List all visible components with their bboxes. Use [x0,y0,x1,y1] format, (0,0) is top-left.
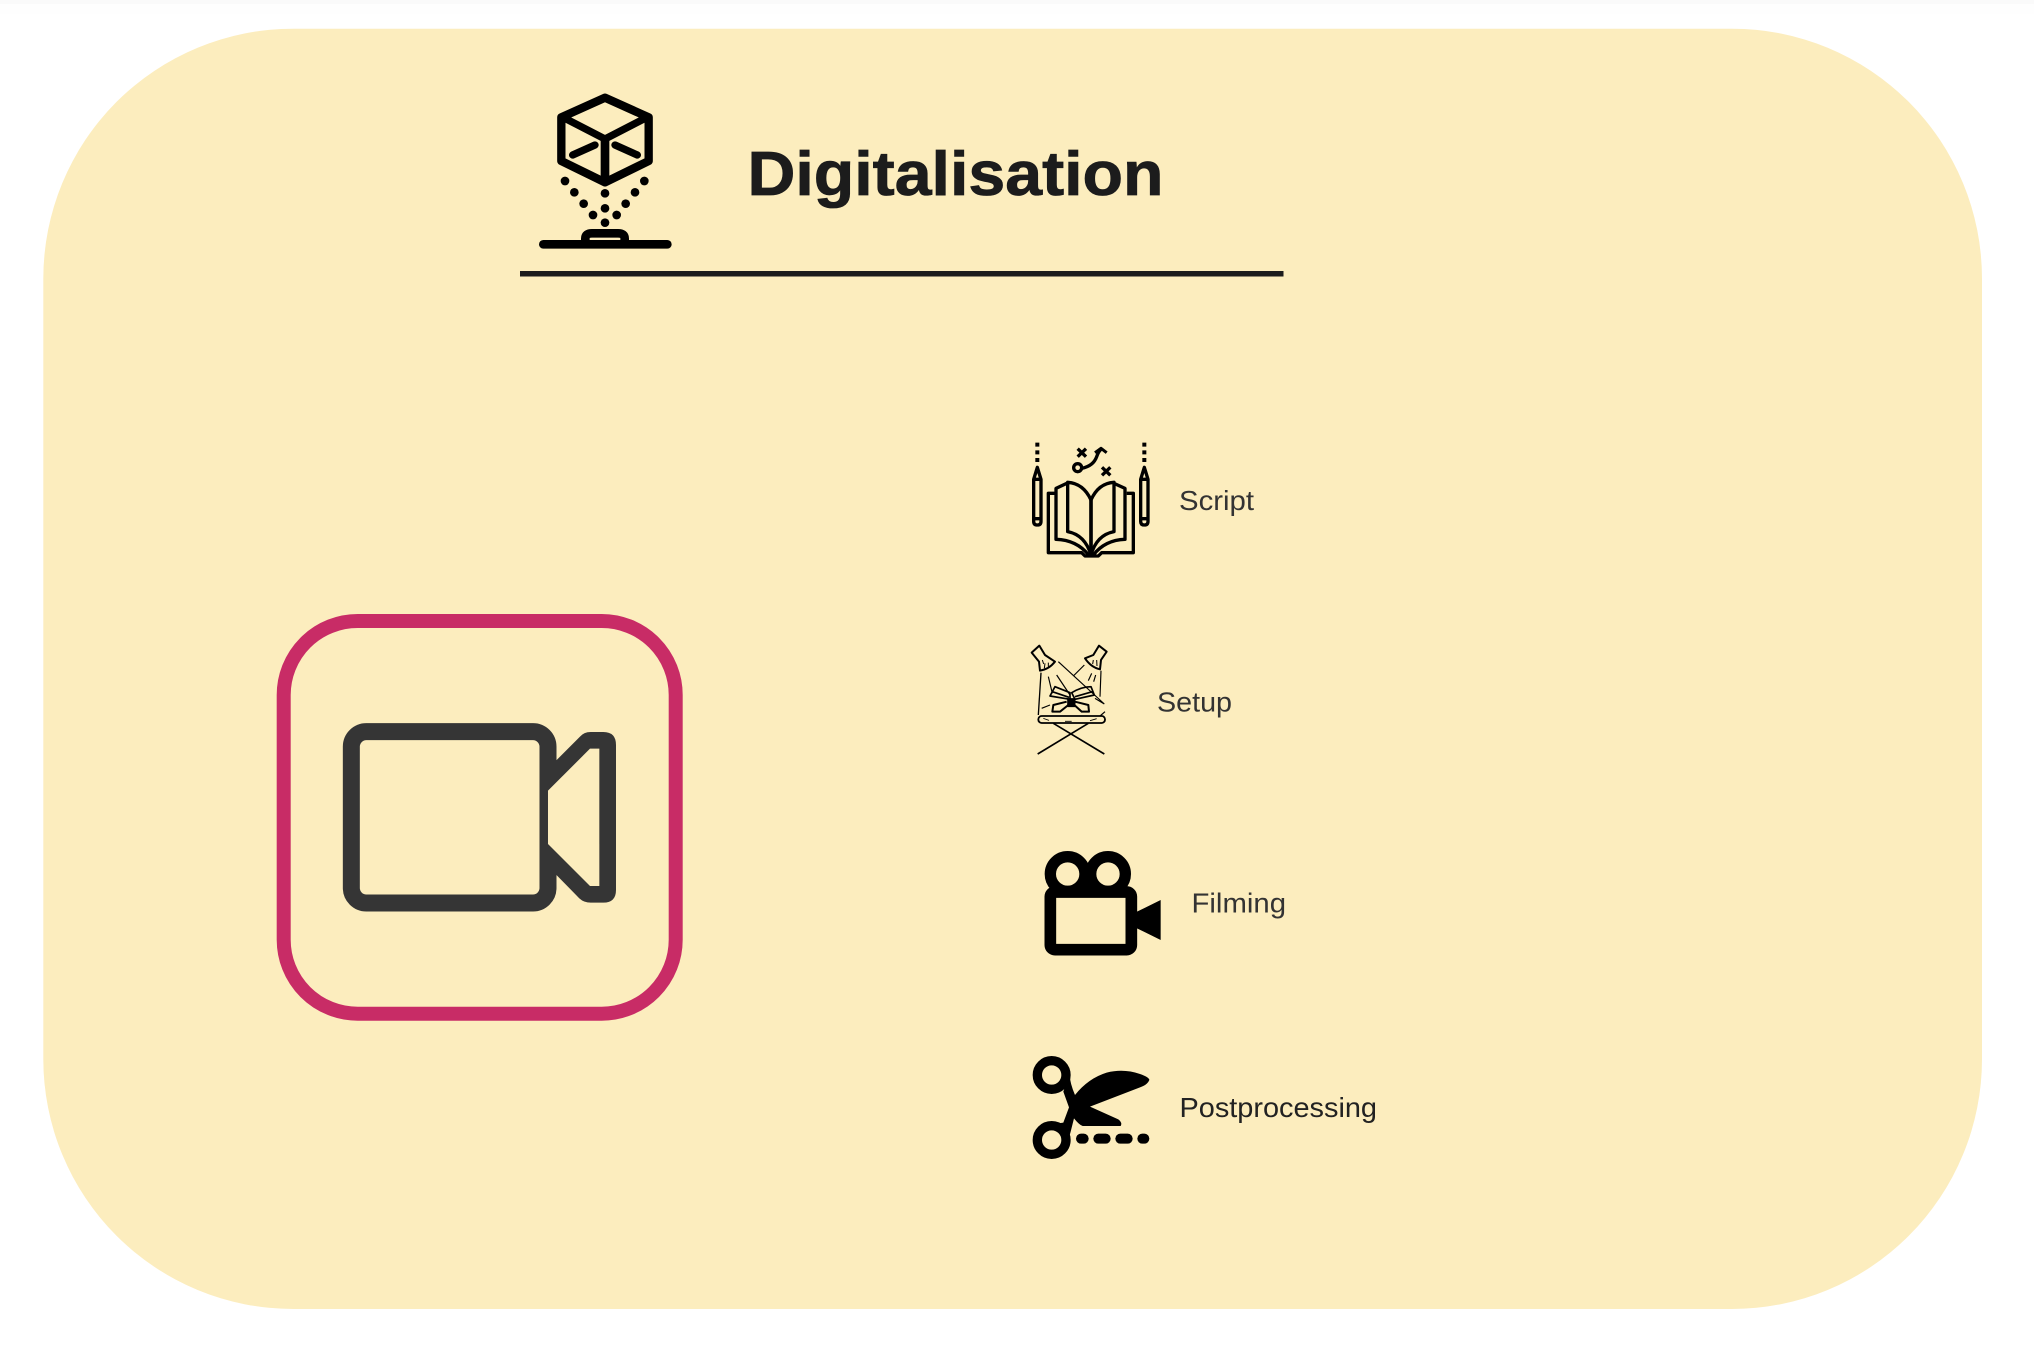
icon: lit book stand [1032,646,1107,754]
heading: icon and title [520,98,1284,277]
icon: film camera [1050,857,1161,950]
title: Digitalisation [748,140,1164,209]
label: Setup: Setup [1157,686,1232,718]
item: setup [1032,646,1232,754]
icon: open book with pencils [1034,443,1148,556]
label: Filming: Filming [1192,888,1286,918]
icon: video camera in rounded frame [284,621,676,1014]
video camera glyph [351,732,616,903]
label: Postprocessing: Postprocessing [1180,1092,1377,1123]
label: Script: Script [1179,485,1254,516]
icon: scissors cutting dashed line [1037,1061,1149,1154]
item: postprocessing [1037,1061,1377,1154]
item: script [1034,443,1254,556]
icon: 3D printing cube [539,98,672,249]
frame [284,621,676,1014]
item: filming [1050,857,1286,950]
